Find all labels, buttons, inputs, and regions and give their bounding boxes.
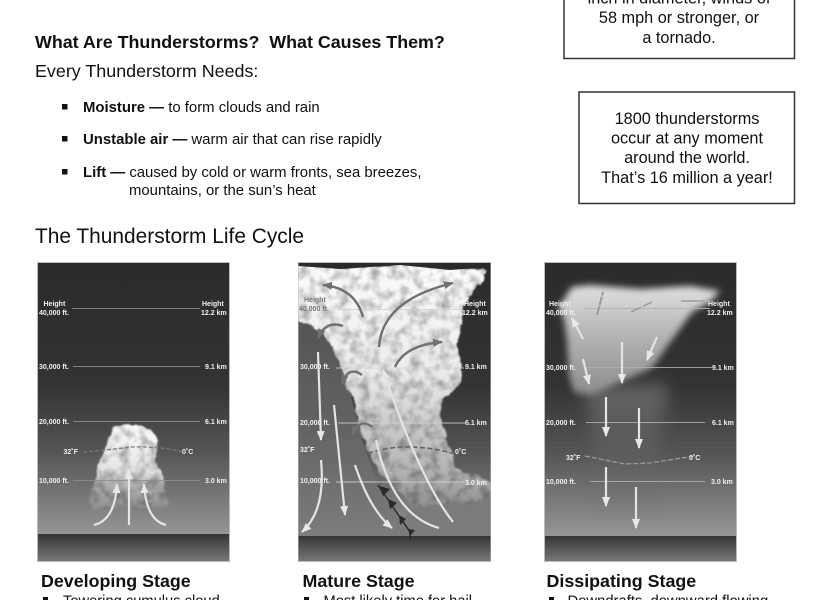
labels: heights: 3.0 km <box>205 478 227 485</box>
labels: heights: 12.2 km <box>462 310 488 317</box>
labels: heights <box>299 297 488 487</box>
labels: heights: 0˚C <box>182 448 193 456</box>
arrows: upper outflow <box>318 283 453 435</box>
heading: what are thunderstorms: What Are Thunderstorms? What Causes Them? <box>35 32 445 52</box>
labels: heights: Height <box>44 301 66 308</box>
callout: 1800 thunderstorms: around the world. <box>624 149 750 167</box>
labels: heights: 0˚C <box>455 448 466 456</box>
callout: 1800 thunderstorms: That’s 16 million a year! <box>601 169 773 187</box>
labels: heights: 0˚C <box>689 454 700 462</box>
shape: fading rain shaft <box>581 378 672 452</box>
labels: heights: 32˚F <box>566 454 581 462</box>
bullet: lift: mountains, or the sun’s heat <box>129 183 317 199</box>
bullet: lift: Lift — caused by cold or warm fronts, sea breezes, <box>83 165 421 181</box>
arrows: downdrafts <box>572 292 705 528</box>
bullet: lift <box>62 165 421 199</box>
labels: heights: Height <box>304 297 326 304</box>
labels: heights: Height <box>549 301 571 308</box>
bullet: moisture: Moisture — to form clouds and rain <box>83 100 320 116</box>
callout: severe thunderstorm definition <box>564 0 794 58</box>
labels: heights: 6.1 km <box>465 420 487 427</box>
labels: heights: 40,000 ft. <box>299 306 329 313</box>
bullet: unstable air: Unstable air — warm air that can rise rapidly <box>83 132 382 148</box>
panel: dissipating stage diagram <box>544 262 737 562</box>
labels: heights: 10,000 ft. <box>300 478 330 485</box>
arrows: updrafts <box>94 470 166 525</box>
labels: heights: 20,000 ft. <box>39 419 69 426</box>
labels: heights: 30,000 ft. <box>39 364 69 371</box>
labels: heights: 20,000 ft. <box>546 420 576 427</box>
panel: mature stage diagram <box>296 262 494 562</box>
labels: heights: Height <box>202 301 224 308</box>
icon: cumulus cloud <box>89 424 168 509</box>
stage text: mature: Mature Stage <box>302 571 415 591</box>
labels: heights: 9.1 km <box>205 364 227 371</box>
callout: severe thunderstorm definition: a tornado. <box>642 29 716 47</box>
labels: heights: 10,000 ft. <box>39 478 69 485</box>
labels: heights: 30,000 ft. <box>546 365 576 372</box>
subheading: every thunderstorm needs: Every Thunderstorm Needs: <box>35 61 258 81</box>
labels: heights: 12.2 km <box>201 310 227 317</box>
icon: storm cloud <box>296 262 494 508</box>
labels: heights: 30,000 ft. <box>300 364 330 371</box>
labels: heights: 6.1 km <box>712 420 734 427</box>
stage text: developing <box>41 571 220 600</box>
labels: heights: 40,000 ft. <box>546 310 576 317</box>
icon: cold front <box>378 485 415 540</box>
labels: heights <box>546 301 734 486</box>
callout: 1800 thunderstorms: occur at any moment <box>611 130 763 148</box>
labels: heights: 9.1 km <box>465 364 487 371</box>
labels: heights: 32˚F <box>300 446 315 454</box>
labels: heights <box>39 301 227 485</box>
icon: dissipating anvil cloud <box>558 285 720 395</box>
list: storm ingredients <box>62 100 421 199</box>
labels: heights: 3.0 km <box>465 480 487 487</box>
labels: heights: 9.1 km <box>712 365 734 372</box>
callout: 1800 thunderstorms: 1800 thunderstorms <box>615 110 759 128</box>
stage text: developing: Developing Stage <box>41 571 191 591</box>
labels: heights: 3.0 km <box>711 479 733 486</box>
labels: heights: 20,000 ft. <box>300 420 330 427</box>
labels: heights: 32˚F <box>64 448 79 456</box>
labels: heights: 12.2 km <box>707 310 733 317</box>
stage text: dissipating: Dissipating Stage <box>546 571 696 591</box>
panel: developing stage diagram <box>37 262 230 562</box>
callout: 1800 thunderstorms <box>579 92 794 204</box>
labels: heights: Height <box>708 301 730 308</box>
labels: heights: 40,000 ft. <box>39 310 69 317</box>
labels: heights: 10,000 ft. <box>546 479 576 486</box>
stage text: mature <box>302 571 472 600</box>
heading: life cycle: The Thunderstorm Life Cycle <box>35 225 304 248</box>
labels: heights: Height <box>464 301 486 308</box>
shape: rain shaft <box>298 320 400 536</box>
stage text: dissipating <box>546 571 768 600</box>
arrows: downdrafts and updrafts <box>302 352 453 532</box>
labels: heights: 6.1 km <box>205 419 227 426</box>
callout: severe thunderstorm definition: 58 mph or stronger, or <box>599 9 760 27</box>
